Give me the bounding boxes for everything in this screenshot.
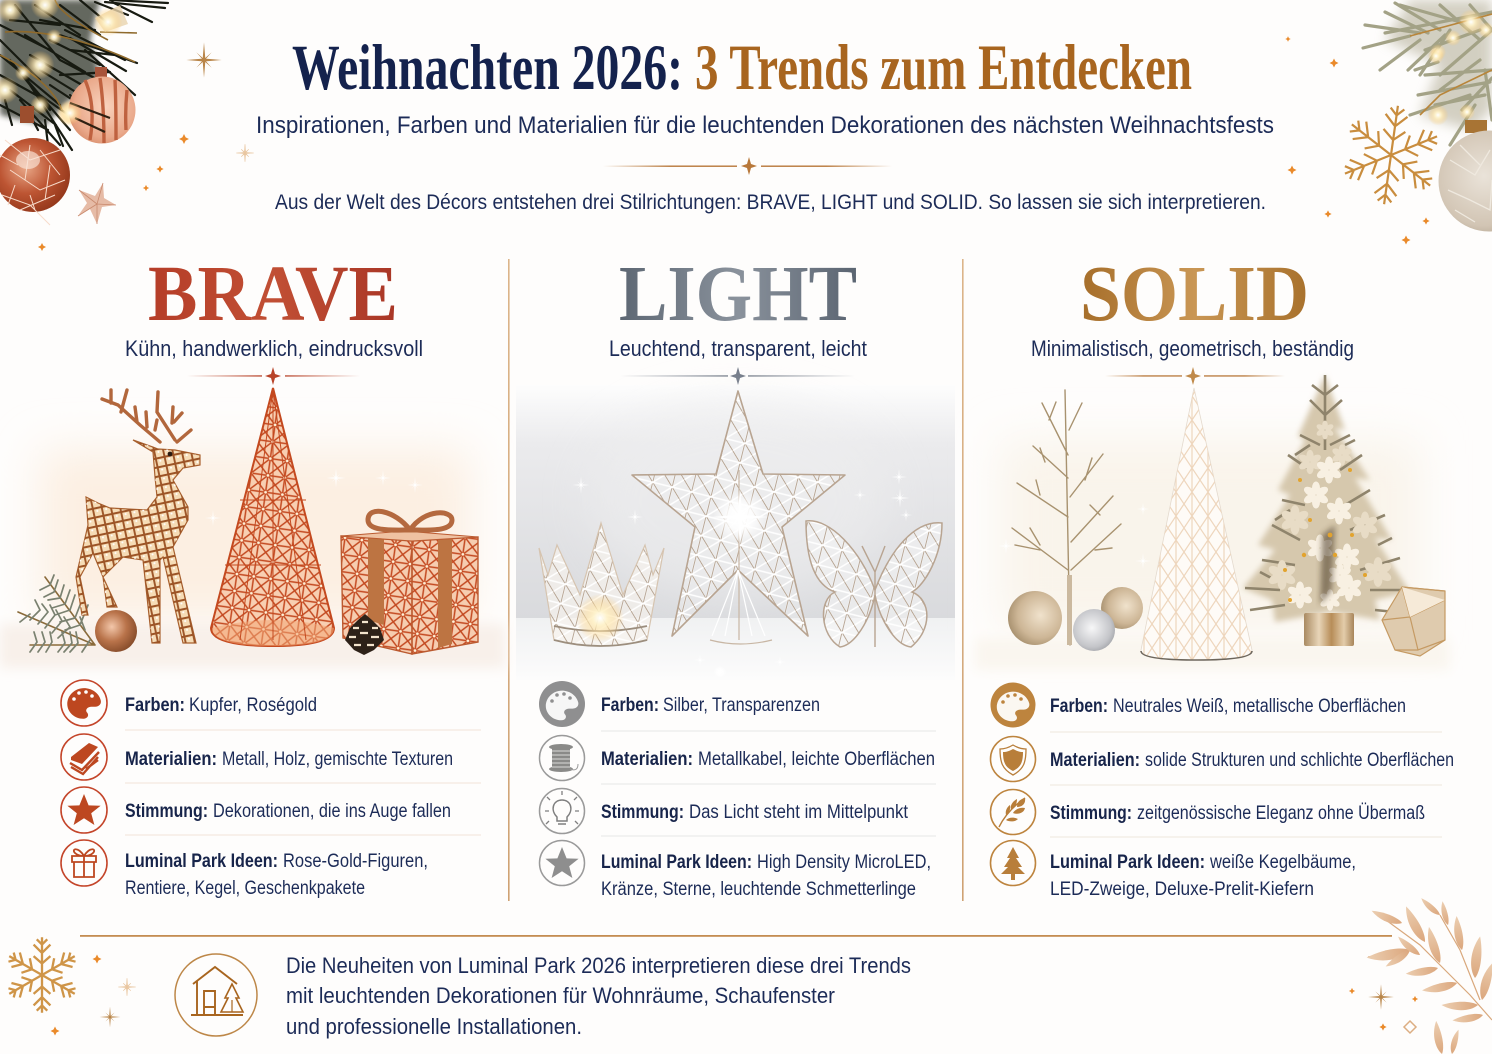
row: Farben: Farben: <box>1050 696 1108 717</box>
wire cone <box>211 388 334 646</box>
row: Luminal Park Ideen: Luminal Park Ideen: <box>1050 852 1205 873</box>
title: 3 Trends zum Entdecken <box>695 32 1192 104</box>
footer text: Die Neuheiten von Luminal Park 2026 interpretieren diese drei Trends <box>286 953 911 978</box>
sparkles <box>205 468 423 526</box>
decoration: top-right pine, snowflake and bauble <box>1285 0 1492 244</box>
heading: SOLID: SOLID <box>1080 251 1309 338</box>
row: Materialien: Metallkabel, leichte Oberflächen <box>698 749 935 770</box>
subtitle: Inspirationen, Farben und Materialien für die leuchtenden Dekorationen des nächsten Weihnachtsfests <box>256 112 1274 139</box>
decoration: top-left sparkles <box>38 42 254 251</box>
row: Farben: Kupfer, Roségold <box>189 695 317 716</box>
divider <box>620 367 855 385</box>
image: white cone, twig tree, fir and baubles <box>975 375 1450 670</box>
pine cone <box>345 614 384 655</box>
row: Luminal Park Ideen: Kränze, Sterne, leuchtende Schmetterlinge <box>601 879 916 900</box>
copper ball <box>95 610 137 652</box>
star <box>632 391 845 644</box>
butterfly <box>806 521 942 647</box>
ornament: copper bauble <box>0 106 70 225</box>
header divider <box>603 157 892 175</box>
baubles <box>1101 587 1143 629</box>
crown <box>539 523 664 646</box>
row: Stimmung: zeitgenössische Eleganz ohne Übermaß <box>1137 803 1425 824</box>
footer text <box>286 953 911 1039</box>
footer: snowflake and sparkles <box>5 937 136 1036</box>
row: Stimmung: Dekorationen, die ins Auge fallen <box>213 801 451 822</box>
row: Luminal Park Ideen: weiße Kegelbäume, <box>1209 852 1356 873</box>
geometric ornament <box>1382 587 1445 656</box>
title <box>292 32 1192 104</box>
footer text: mit leuchtenden Dekorationen für Wohnräume, Schaufenster <box>286 983 835 1008</box>
row: Materialien: Materialien: <box>125 749 217 770</box>
divider <box>187 367 360 385</box>
row: Materialien: Materialien: <box>601 749 693 770</box>
row: Farben <box>539 681 820 727</box>
footer icon: house and tree <box>175 954 257 1036</box>
row: Farben <box>990 682 1406 728</box>
row: Luminal Park Ideen <box>990 840 1356 900</box>
icon: gold snowflake <box>1336 99 1446 211</box>
panel: SOLID <box>975 251 1454 900</box>
footer rule <box>80 935 1392 937</box>
row: Farben <box>61 680 317 726</box>
row: Luminal Park Ideen: LED-Zweige, Deluxe-Prelit-Kiefern <box>1050 879 1314 900</box>
image: copper reindeer, cone and gift <box>0 388 505 668</box>
ornament: pearl bauble <box>1438 120 1492 232</box>
image: silver star, crown and butterfly <box>516 385 955 680</box>
column separators <box>508 259 964 901</box>
sparkles <box>998 503 1151 569</box>
row: Luminal Park Ideen <box>540 840 931 900</box>
panel: LIGHT <box>516 251 955 900</box>
row: Stimmung <box>990 790 1425 834</box>
row: Stimmung: Stimmung: <box>1050 803 1132 824</box>
decoration: top-left pine branch and baubles <box>0 0 168 225</box>
row: Materialien: Metall, Holz, gemischte Texturen <box>222 749 453 770</box>
footer text: und professionelle Installationen. <box>286 1014 582 1039</box>
heading: BRAVE: BRAVE <box>148 251 398 338</box>
row: Farben: Neutrales Weiß, metallische Oberflächen <box>1113 696 1406 717</box>
row: Stimmung: Das Licht steht im Mittelpunkt <box>689 802 909 823</box>
tagline: Kühn, handwerklich, eindrucksvoll <box>125 336 423 361</box>
divider <box>1105 367 1285 385</box>
ornament: rose-gold bauble <box>58 67 136 144</box>
row: Stimmung <box>61 787 451 833</box>
fir tree <box>1243 375 1410 646</box>
row: Luminal Park Ideen: Rose-Gold-Figuren, <box>283 851 428 872</box>
row: Stimmung: Stimmung: <box>125 801 208 822</box>
row: Farben: Farben: <box>601 695 659 716</box>
row: Stimmung <box>540 788 909 834</box>
row: Luminal Park Ideen: Luminal Park Ideen: <box>601 852 752 873</box>
row: Stimmung: Stimmung: <box>601 802 684 823</box>
row: Farben: Farben: <box>125 695 185 716</box>
reindeer <box>76 390 200 643</box>
tagline: Leuchtend, transparent, leicht <box>609 336 867 361</box>
white cone <box>1141 388 1252 660</box>
sparkles <box>572 469 912 678</box>
heading: LIGHT: LIGHT <box>619 251 857 338</box>
pot <box>1304 613 1354 646</box>
row: Materialien <box>990 736 1454 782</box>
gift box <box>341 511 478 654</box>
row: Farben: Silber, Transparenzen <box>663 695 820 716</box>
title: Weihnachten 2026: <box>292 32 683 104</box>
tagline: Minimalistisch, geometrisch, beständig <box>1031 336 1354 361</box>
row: Luminal Park Ideen <box>61 840 428 899</box>
row: Materialien: Materialien: <box>1050 750 1140 771</box>
row: Luminal Park Ideen: Rentiere, Kegel, Geschenkpakete <box>125 878 365 899</box>
sprig <box>18 575 95 652</box>
row: Luminal Park Ideen: Luminal Park Ideen: <box>125 851 278 872</box>
row: Materialien <box>540 736 935 780</box>
decoration: bottom-right leaves and sparkles <box>1349 896 1492 1054</box>
row: Materialien <box>61 734 453 780</box>
ornament: small star <box>78 183 116 224</box>
row: Luminal Park Ideen: High Density MicroLED, <box>757 852 931 873</box>
panel: BRAVE <box>0 251 505 899</box>
twig tree <box>1012 390 1121 645</box>
intro text: Aus der Welt des Décors entstehen drei Stilrichtungen: BRAVE, LIGHT und SOLID. So lassen sie sich interpretieren. <box>275 191 1266 214</box>
